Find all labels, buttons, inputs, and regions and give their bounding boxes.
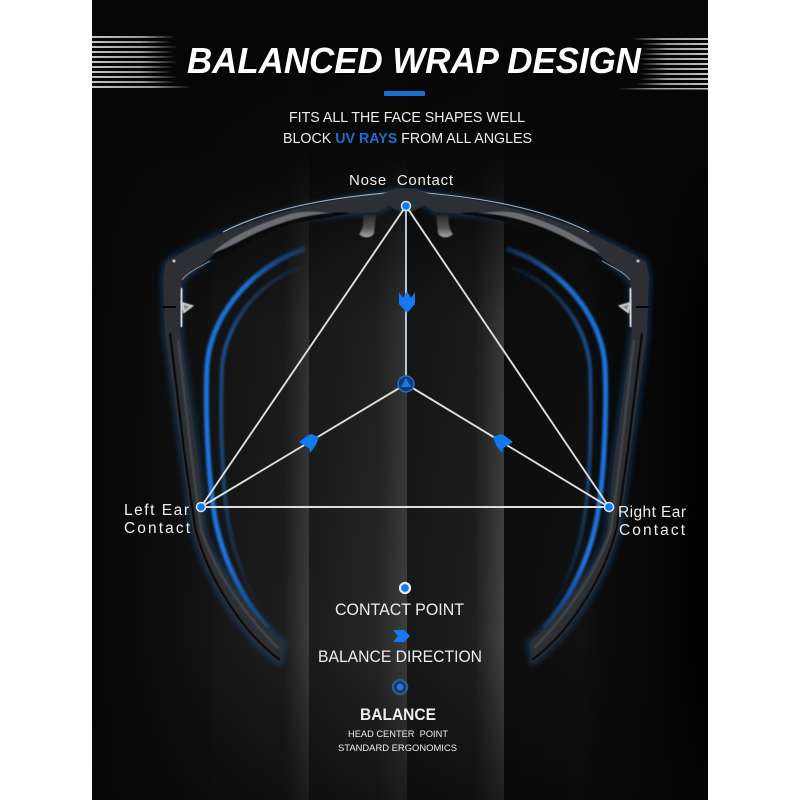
subtitle: BLOCK UV RAYS FROM ALL ANGLES [283, 131, 532, 147]
legend: balance: HEAD CENTER POINT [348, 729, 448, 740]
legend: contact point [335, 583, 464, 619]
title: BALANCED WRAP DESIGN [187, 40, 642, 81]
legend: balance [338, 680, 457, 754]
title speed lines right [618, 38, 708, 90]
glasses: right side [406, 189, 649, 663]
label: left ear contact [124, 502, 191, 537]
balance point [398, 376, 414, 392]
glasses: nose bridge [376, 188, 436, 212]
arrow: right ear to center [493, 434, 513, 453]
left ear contact point [196, 502, 206, 512]
legend: balance direction: BALANCE DIRECTION [318, 648, 482, 666]
legend: balance: BALANCE [360, 706, 436, 724]
label: left ear contact: Left Ear [124, 502, 189, 519]
title accent bar [384, 91, 425, 96]
label: nose contact: Nose Contact [349, 172, 454, 189]
legend: contact point: CONTACT POINT [335, 601, 464, 619]
title speed lines left [92, 36, 192, 88]
label: right ear contact [618, 504, 686, 539]
label: right ear contact: Contact [619, 522, 686, 539]
arrow: nose to center [399, 291, 415, 313]
label: left ear contact: Contact [124, 520, 191, 537]
subtitle [283, 110, 532, 147]
legend: balance direction [318, 630, 482, 666]
label: right ear contact: Right Ear [618, 504, 686, 521]
arrow: left ear to center [299, 434, 319, 453]
nose contact point [402, 202, 410, 210]
subtitle: FITS ALL THE FACE SHAPES WELL [289, 110, 525, 126]
glasses: left side [163, 189, 406, 663]
balance triangle lines [201, 206, 609, 507]
legend: balance: STANDARD ERGONOMICS [338, 743, 457, 754]
dark panel background [92, 0, 708, 800]
right ear contact point [604, 502, 614, 512]
